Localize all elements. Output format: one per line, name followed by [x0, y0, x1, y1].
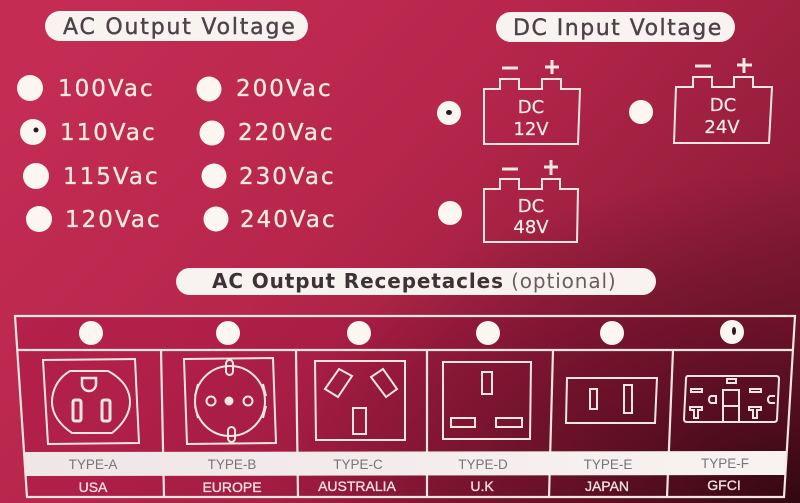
radio: type E [600, 321, 624, 345]
heading: AC Output Voltage: AC Output Voltage [63, 15, 297, 40]
label: USA: USA [79, 479, 108, 495]
panel: receptacle table [15, 316, 795, 497]
option: 240Vac: 240Vac [240, 207, 337, 233]
radio: type D [476, 321, 500, 345]
icon: type C socket [315, 361, 405, 440]
icon: type F GFCI socket [684, 376, 779, 422]
label: TYPE-E: TYPE-E [584, 457, 632, 472]
label: TYPE-C: TYPE-C [333, 457, 383, 472]
option: 230Vac: 230Vac [239, 164, 336, 190]
icon: battery DC 48V: DC [518, 196, 544, 217]
option: 200Vac: 200Vac [236, 76, 333, 102]
icon: type E socket [566, 378, 657, 423]
icon: battery DC 24V: DC [710, 95, 736, 116]
icon: battery DC 24V: 24V [704, 117, 740, 138]
heading: AC Output Receptacles: AC Output Recepetacles (optional) [212, 269, 617, 293]
label: EUROPE: EUROPE [202, 479, 262, 495]
icon: battery DC 12V: DC [518, 97, 544, 118]
option: 120Vac [26, 206, 162, 233]
option: 220Vac: 220Vac [238, 120, 335, 146]
icon: battery DC 12V: 12V [513, 119, 549, 140]
radio: type B [216, 321, 240, 345]
radio: type F selected [720, 320, 744, 344]
option: 115Vac: 115Vac [63, 164, 160, 190]
icon: battery DC 48V [484, 160, 578, 242]
table frame [15, 316, 795, 497]
label: GFCI: GFCI [707, 477, 741, 493]
label: JAPAN: JAPAN [585, 478, 629, 494]
icon: battery DC 48V: 48V [513, 217, 549, 238]
radio: type A [79, 321, 103, 345]
panel: DC input voltage [437, 12, 772, 242]
icon: battery DC 12V [484, 60, 580, 144]
label: TYPE-F: TYPE-F [701, 456, 749, 471]
heading: DC Input Voltage: DC Input Voltage [513, 16, 723, 41]
option: 110Vac selected [20, 119, 157, 146]
option: 110Vac selected: 110Vac [60, 120, 157, 146]
icon: type A socket [43, 359, 139, 444]
option: 100Vac [17, 75, 155, 102]
label: TYPE-D: TYPE-D [458, 457, 508, 472]
radio: DC 12V selected [437, 101, 461, 125]
panel: AC output voltage [17, 11, 337, 233]
option: 120Vac: 120Vac [65, 207, 162, 233]
label: U.K: U.K [470, 478, 494, 494]
option: 100Vac: 100Vac [58, 76, 155, 102]
label: TYPE-B: TYPE-B [208, 457, 256, 472]
radio: DC 24V [629, 100, 653, 124]
radio: type C [347, 321, 371, 345]
white label band [25, 451, 786, 476]
icon: type B socket [184, 358, 276, 444]
radio: DC 48V [438, 201, 462, 225]
icon: type D socket [443, 362, 531, 439]
option: 115Vac [23, 163, 160, 190]
icon: battery DC 24V [674, 58, 772, 143]
label: AUSTRALIA: AUSTRALIA [318, 478, 397, 494]
label: TYPE-A: TYPE-A [69, 457, 117, 472]
